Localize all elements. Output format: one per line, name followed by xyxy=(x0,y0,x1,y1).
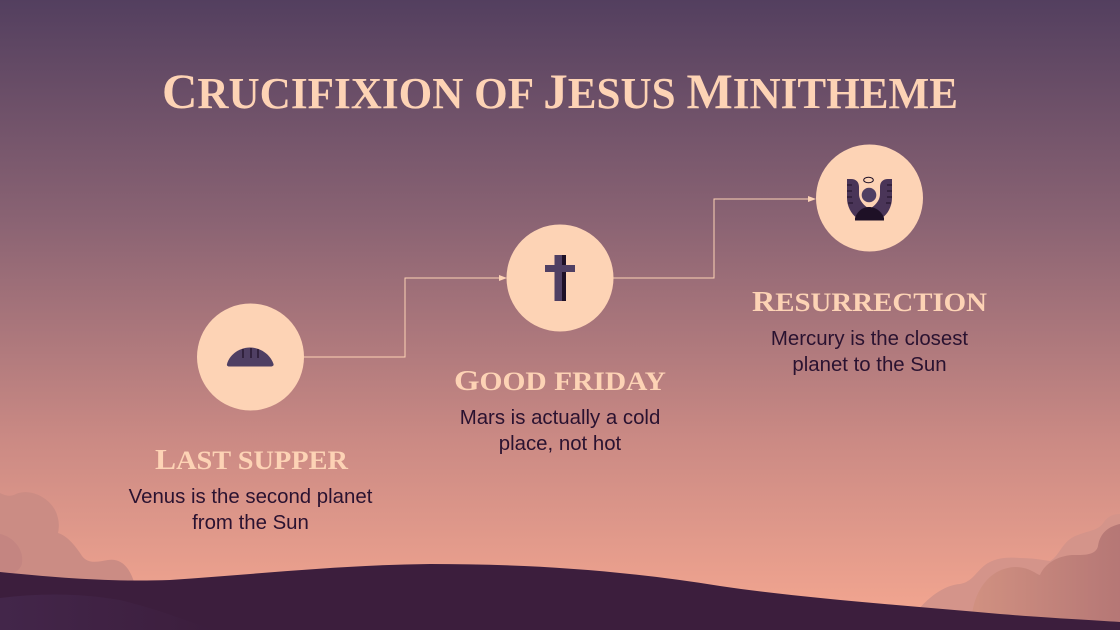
heading: good friday: GOOD FRIDAY xyxy=(454,365,666,397)
icon: bread xyxy=(227,348,274,366)
text: last supper description: from the Sun xyxy=(192,512,309,534)
text: resurrection description: planet to the Sun xyxy=(792,354,947,376)
node: resurrection circle xyxy=(816,144,923,252)
title: CRUCIFIXION OF JESUS MINITHEME xyxy=(162,63,958,119)
connector: last supper to good friday xyxy=(304,275,507,357)
foreground hill xyxy=(0,564,1120,630)
right clouds xyxy=(918,514,1120,630)
heading: last supper: LAST SUPPER xyxy=(155,444,348,476)
node: good friday circle xyxy=(506,224,614,332)
icon: angel xyxy=(847,177,892,220)
text: resurrection description: Mercury is the closest xyxy=(771,328,968,350)
text: good friday description: place, not hot xyxy=(499,433,622,455)
icon: cross xyxy=(545,255,575,301)
left clouds xyxy=(0,492,135,585)
lower hill shade xyxy=(0,594,215,630)
node: last supper circle xyxy=(197,304,304,410)
heading: resurrection: RESURRECTION xyxy=(752,286,987,318)
connector: good friday to resurrection xyxy=(613,196,816,278)
text: last supper description: Venus is the second planet xyxy=(129,486,373,508)
text: good friday description: Mars is actually a cold xyxy=(460,407,660,429)
